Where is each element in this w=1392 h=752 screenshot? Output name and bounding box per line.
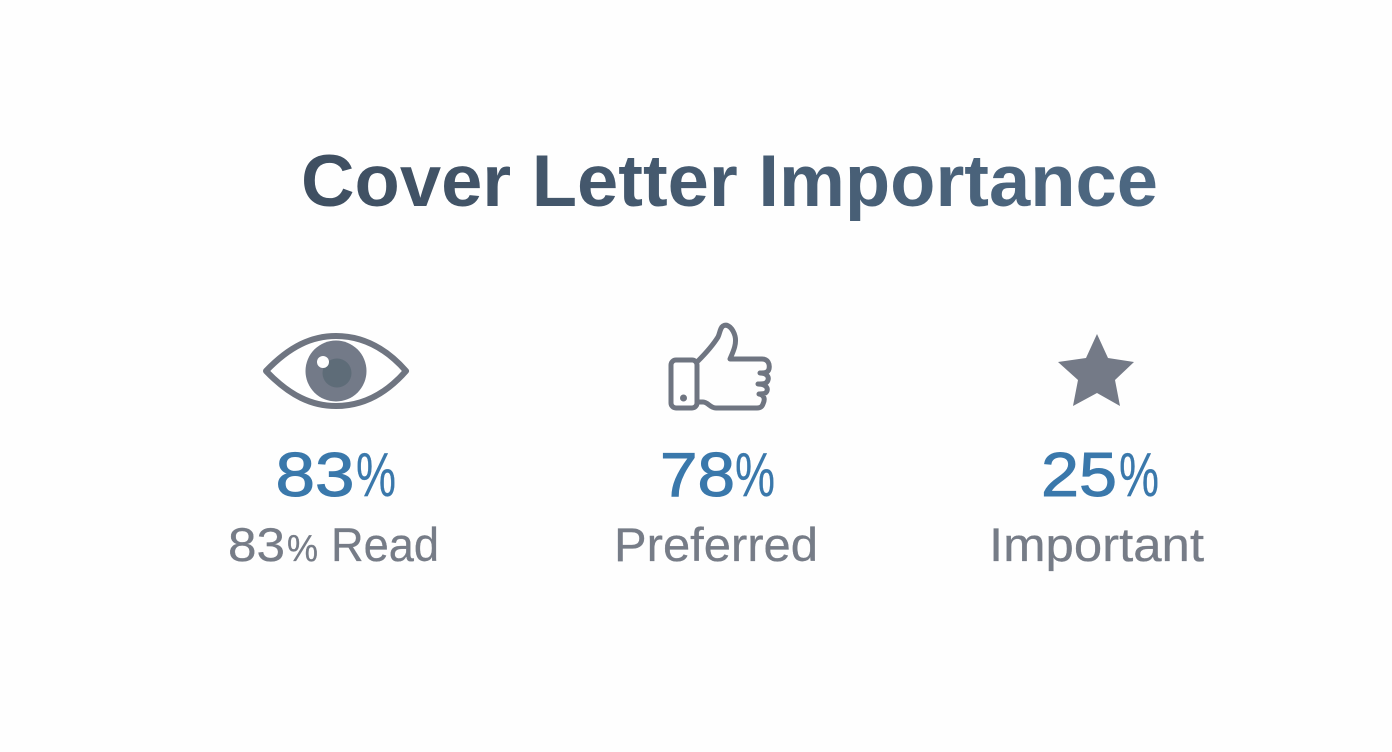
label: 83% Read: Read bbox=[331, 518, 439, 571]
label: Important: Important bbox=[989, 518, 1204, 571]
title: Cover Letter Importance bbox=[301, 141, 1158, 222]
stat: 25%: % bbox=[1119, 441, 1159, 510]
stat: 25% bbox=[1041, 441, 1159, 510]
stat: 25%: 25 bbox=[1041, 441, 1117, 510]
stat: 83% bbox=[276, 441, 396, 510]
panel: 78% preferred bbox=[614, 325, 818, 571]
stat: 83%: 83 bbox=[276, 441, 354, 510]
panel: 25% important bbox=[989, 334, 1204, 571]
stat: 78%: 78 bbox=[660, 441, 735, 510]
label: 83% Read: % bbox=[287, 528, 318, 570]
icon: star bbox=[1058, 334, 1134, 406]
stat: 78%: % bbox=[735, 441, 775, 510]
icon: thumbs up bbox=[671, 325, 769, 408]
icon: eye bbox=[266, 336, 406, 406]
stat: 83%: % bbox=[356, 441, 396, 510]
label: Preferred: Preferred bbox=[614, 518, 818, 571]
panel: 83% read bbox=[228, 336, 439, 571]
stat: 78% bbox=[660, 441, 775, 510]
label: 83% Read: 83 bbox=[228, 518, 285, 571]
